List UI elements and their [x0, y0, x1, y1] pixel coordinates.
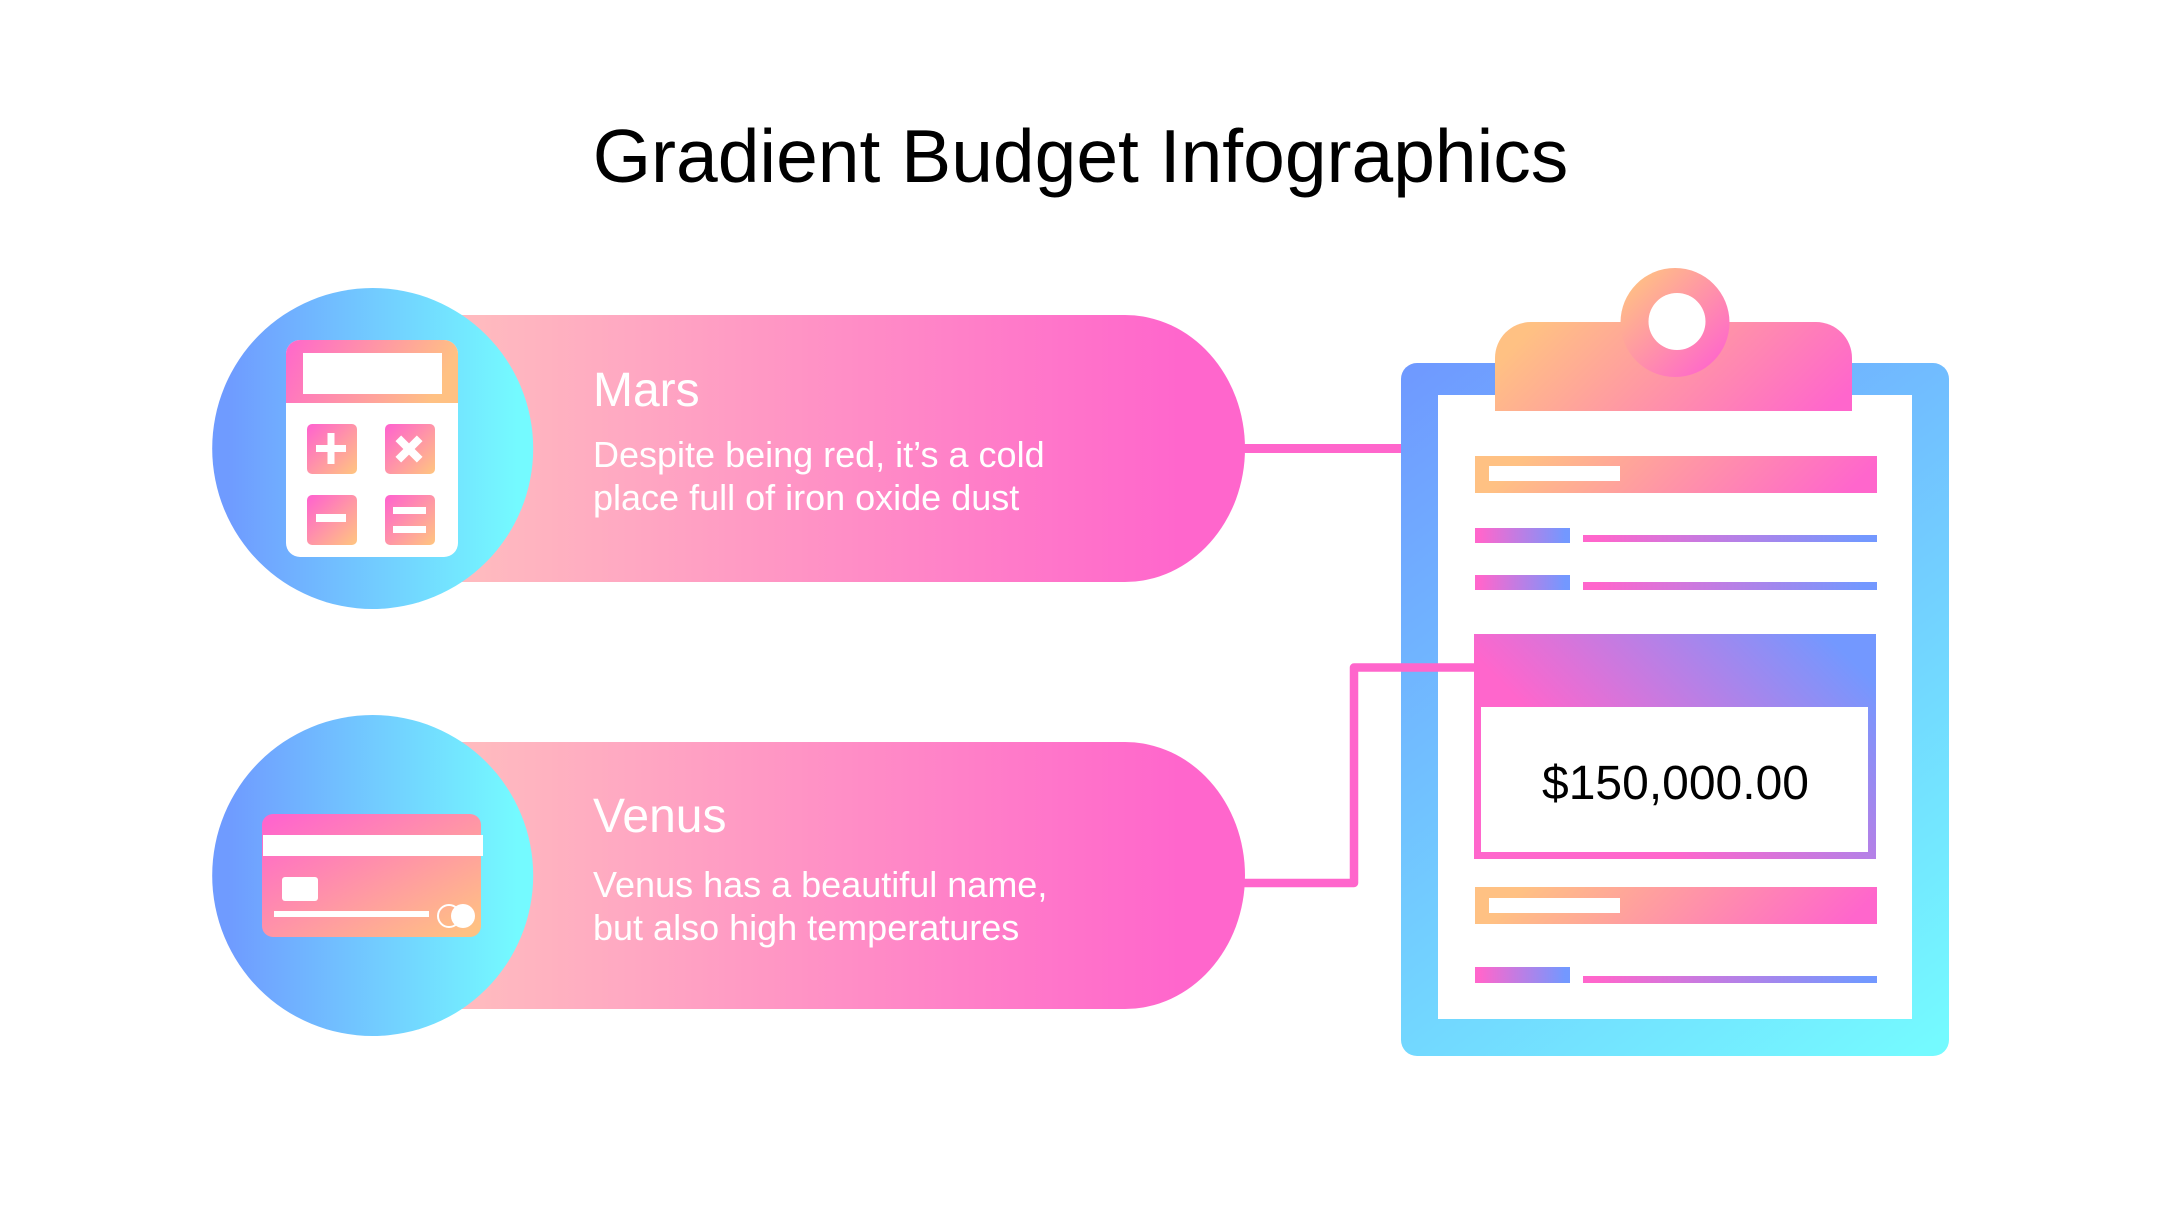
- pill: Venus background: [372, 742, 1245, 1009]
- heading: Venus: Venus: [593, 790, 726, 843]
- text: Venus description: Venus has a beautiful name,: [593, 864, 1047, 905]
- header bar 1: [1475, 456, 1877, 493]
- heading: Mars: Mars: [593, 364, 700, 417]
- text: Mars description: Despite being red, it’s a cold: [593, 434, 1045, 475]
- header bar 2: [1475, 887, 1877, 924]
- clipboard clip: [1495, 268, 1852, 411]
- circle: Venus icon background: [212, 715, 533, 1036]
- panel: Venus: [212, 715, 1245, 1036]
- amount text: $150,000.00: [1542, 757, 1809, 810]
- title: Gradient Budget Infographics: [593, 114, 1568, 198]
- row 2: [1475, 575, 1877, 590]
- row 1: [1475, 528, 1877, 543]
- pill: Mars background: [372, 315, 1245, 582]
- circle: Mars icon background: [212, 288, 533, 609]
- text: Mars description: place full of iron oxide dust: [593, 477, 1019, 518]
- amount box: [1474, 634, 1876, 859]
- connector: Venus to amount box: [1240, 668, 1476, 883]
- connector: Mars to clipboard: [1240, 444, 1402, 453]
- text: Venus description: but also high temperatures: [593, 907, 1019, 948]
- panel: Mars: [212, 288, 1245, 609]
- clipboard board: [1401, 363, 1949, 1056]
- icon: credit card: [262, 814, 483, 937]
- row 3: [1475, 967, 1877, 983]
- clipboard: [1401, 268, 1949, 1056]
- icon: calculator: [286, 340, 458, 557]
